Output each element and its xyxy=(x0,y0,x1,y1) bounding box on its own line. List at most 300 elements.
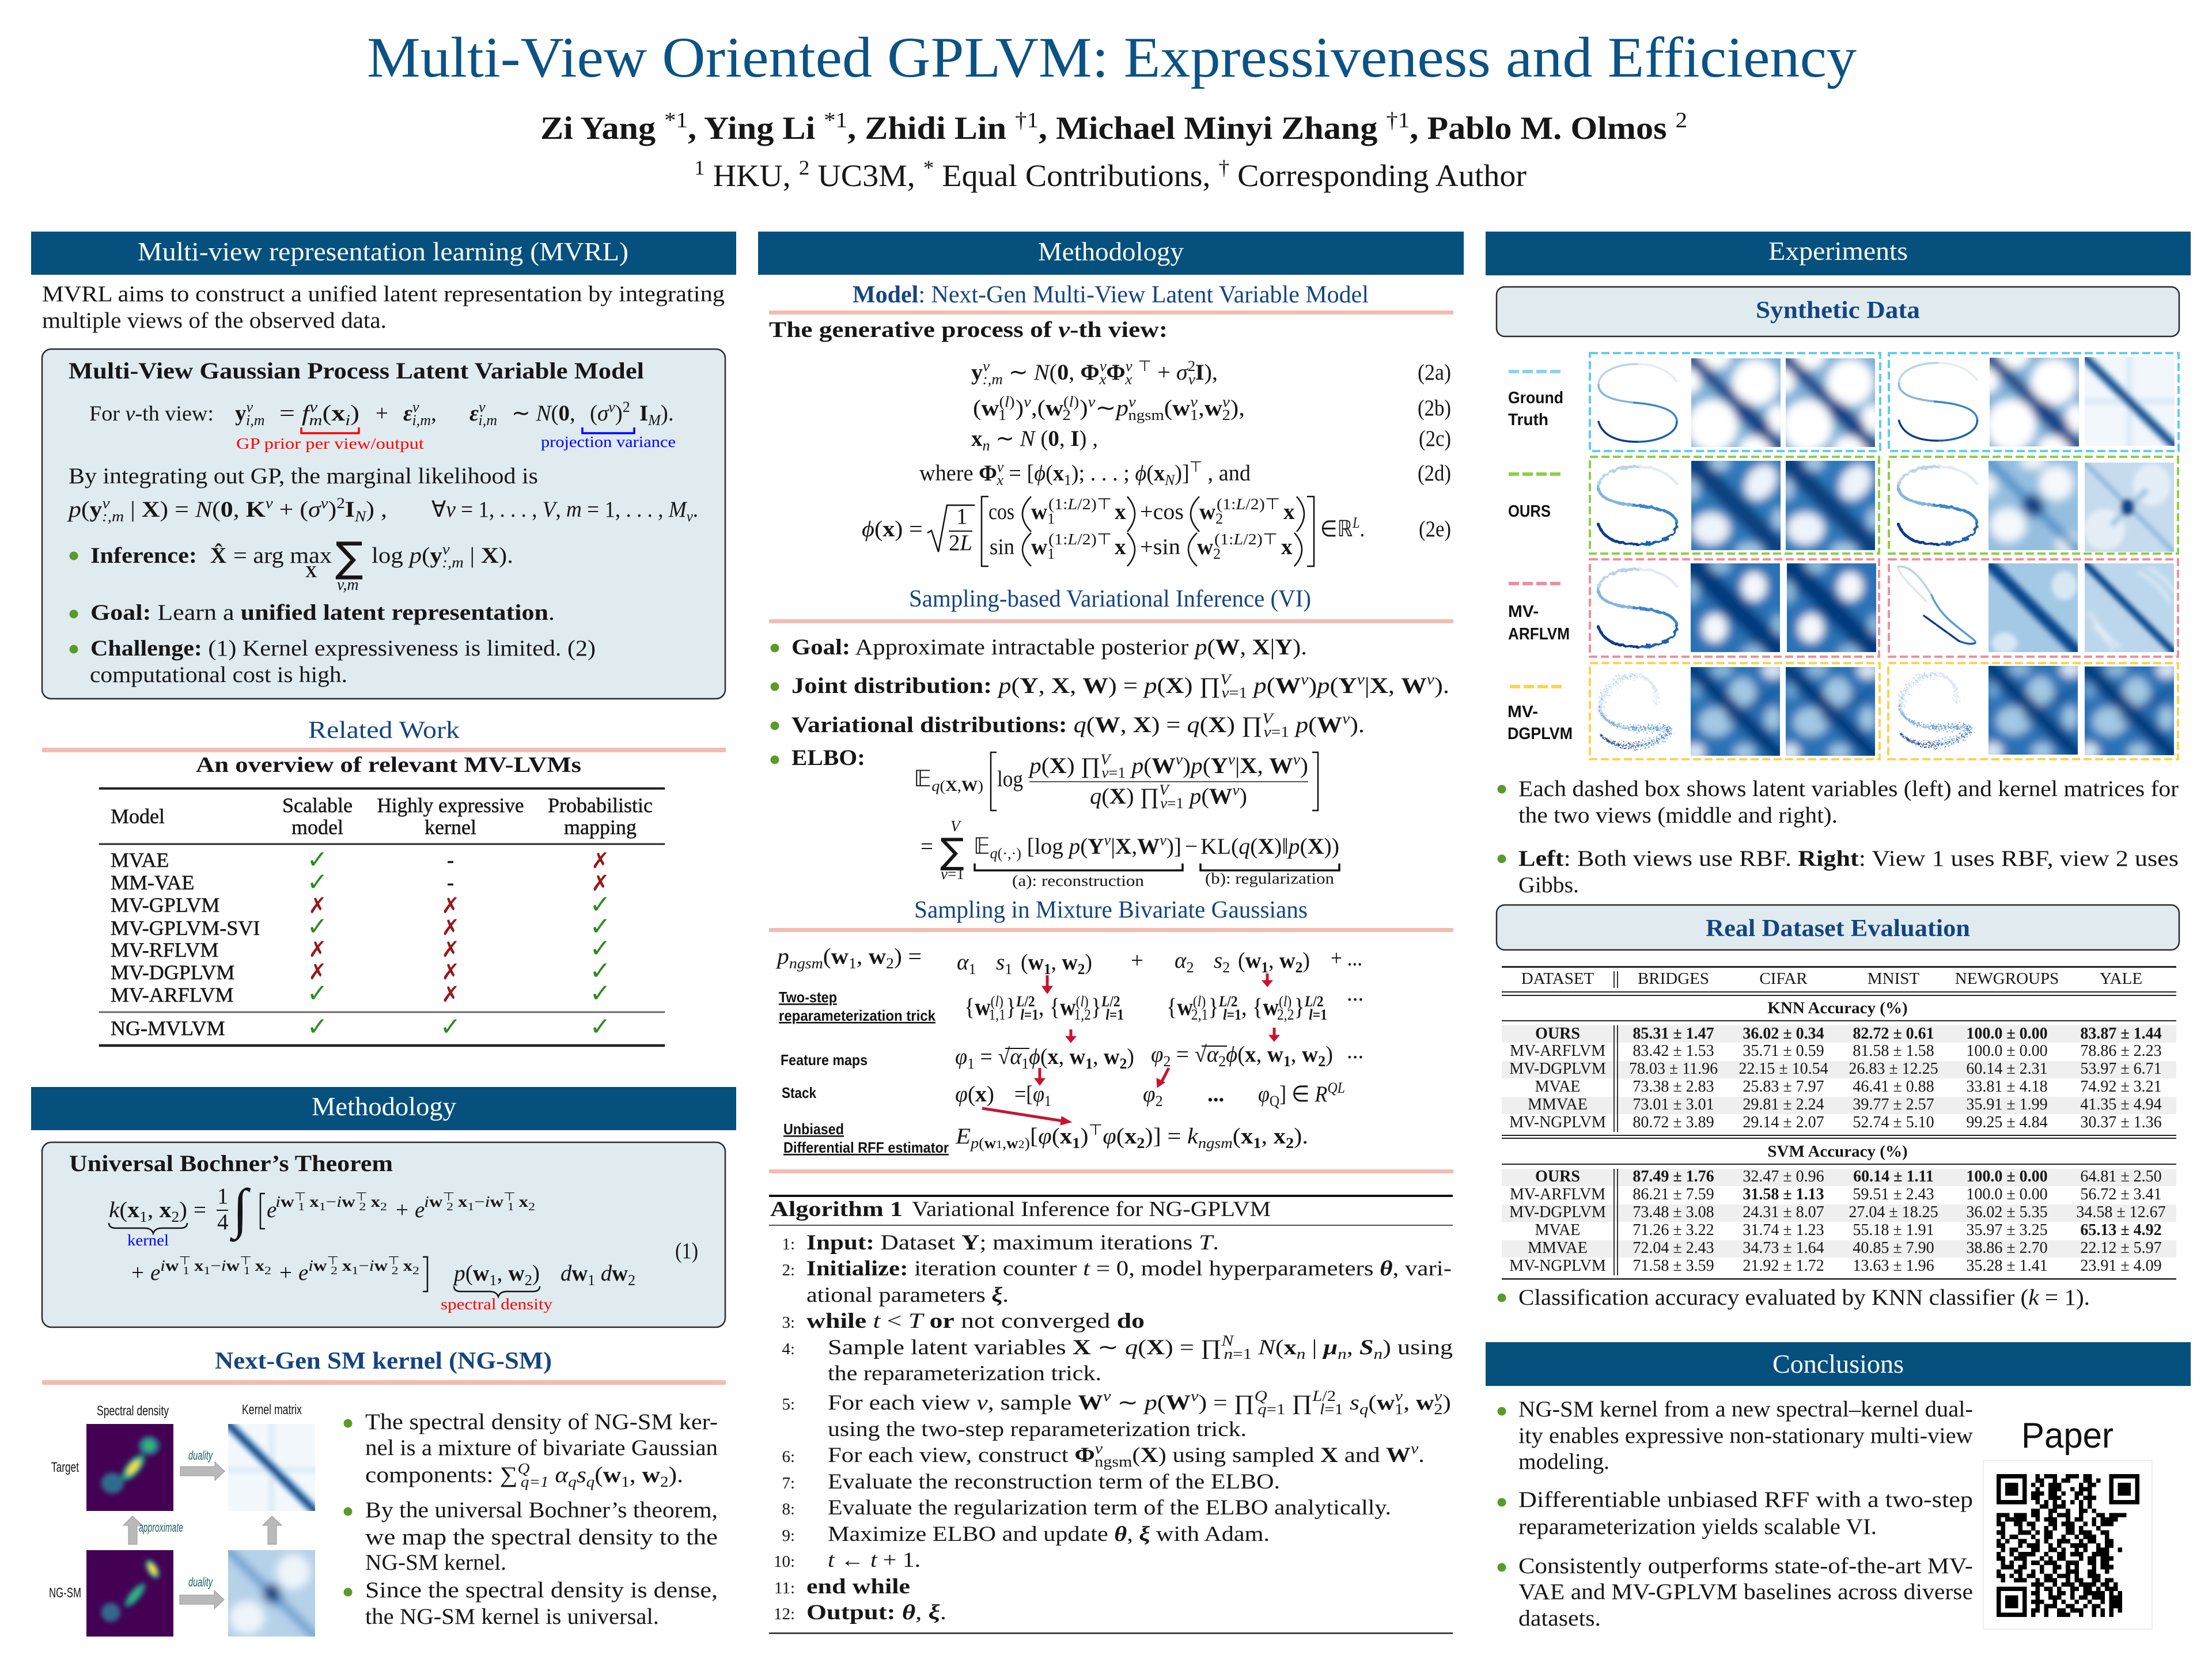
bullet: left right xyxy=(1498,846,2179,897)
bullet: differentiable RFF: reparameterization yields scalable VI. xyxy=(1518,1514,1877,1539)
equation: Bochner kernel: e xyxy=(298,1260,308,1285)
section header: MVRL: Multi-view representation learning (MVRL) xyxy=(138,237,628,266)
figure: sampling diagram: reparameterization trick xyxy=(779,1007,935,1024)
equation: v-th view: IM). xyxy=(639,401,674,429)
bullet: challenge xyxy=(69,636,596,687)
table: accuracy: 41.35 ± 4.94 xyxy=(2080,1096,2162,1113)
table: accuracy: 22.12 ± 5.97 xyxy=(2080,1239,2162,1257)
bullet: NG-SM duality: modeling. xyxy=(1518,1449,1609,1474)
equations 2a to 2e: ∈ℝL. xyxy=(1320,514,1365,541)
table: accuracy: 73.38 ± 2.83 xyxy=(1633,1078,1714,1096)
algorithm 1: 10: xyxy=(774,1552,795,1571)
table: relevant MV-LVMs: mapping xyxy=(564,816,637,839)
algorithm 1: Evaluate the reconstruction term of the ELBO. xyxy=(828,1470,1280,1494)
bullets: NG-SM kernel xyxy=(343,1410,718,1629)
generative process heading: The generative process of v-th view: xyxy=(769,317,1168,342)
table: accuracy: 55.18 ± 1.91 xyxy=(1853,1221,1934,1239)
table: accuracy: 38.86 ± 2.70 xyxy=(1966,1239,2048,1257)
table: accuracy: MV-NGPLVM xyxy=(1509,1113,1606,1131)
panel: related work xyxy=(42,717,726,1047)
table: accuracy: 60.14 ± 1.11 xyxy=(1853,1168,1934,1185)
equation: Bochner kernel: 1 xyxy=(217,1184,228,1209)
figure: spectral density to kernel matrix: Spectral density xyxy=(97,1403,169,1419)
table: accuracy: DATASET xyxy=(1521,969,1594,988)
figure: sampling diagram: Differential RFF estimator xyxy=(783,1139,949,1156)
figure: sampling diagram: φQ] ∈ RQL xyxy=(1258,1080,1345,1109)
algorithm 1: 12: xyxy=(774,1605,795,1623)
table: accuracy: 71.58 ± 3.59 xyxy=(1633,1257,1714,1275)
algorithm 1: Sample latent variables X ∼ q(X) = ∏ Nn=1 N(xn | μn, Sn) using xyxy=(828,1332,1453,1362)
table: relevant MV-LVMs: ✗ xyxy=(591,870,609,896)
figure: sampling diagram: φ(x) xyxy=(955,1082,994,1107)
table: relevant MV-LVMs: MV-RFLVM xyxy=(111,938,218,961)
table: relevant MV-LVMs: ✗ xyxy=(441,937,460,962)
equations 2a to 2e xyxy=(862,358,1451,566)
legend labels xyxy=(1508,372,1573,743)
table: relevant MV-LVMs: ✗ xyxy=(441,982,460,1007)
equations 2a to 2e: (1:L/2)⊤ xyxy=(1217,495,1280,513)
equations 2a to 2e: (2c) xyxy=(1419,426,1451,451)
equations 2a to 2e: (1:L/2)⊤ xyxy=(1048,531,1112,548)
table: accuracy: OURS xyxy=(1535,1168,1580,1185)
table: accuracy: 35.28 ± 1.41 xyxy=(1966,1257,2048,1275)
section header: methodology xyxy=(758,232,1464,275)
bullet: goal: Goal: Approximate intractable posterior p(W, X|Y). xyxy=(791,635,1307,660)
bullet: variational distributions: Variational distributions: q(W, X) = q(X) ∏ Vv=1 p(Wv). xyxy=(791,710,1365,740)
section header: methodology xyxy=(31,1087,736,1130)
section header: methodology: Methodology xyxy=(312,1092,456,1121)
equation: v-th view xyxy=(89,399,676,452)
table: relevant MV-LVMs: ✓ xyxy=(307,979,328,1008)
equations 2a to 2e: sin xyxy=(990,535,1014,559)
bullet: ELBO: ELBO: xyxy=(791,745,865,770)
box: real dataset evaluation xyxy=(1497,905,2179,950)
table: accuracy: 36.02 ± 5.35 xyxy=(1966,1203,2048,1221)
legend labels: OURS xyxy=(1508,502,1551,521)
table: accuracy: 71.26 ± 3.22 xyxy=(1633,1221,1714,1239)
table: accuracy: 78.03 ± 11.96 xyxy=(1629,1060,1718,1078)
table: accuracy: 32.47 ± 0.96 xyxy=(1743,1168,1824,1185)
table: accuracy: 39.77 ± 2.57 xyxy=(1853,1096,1934,1113)
algorithm 1: For each view, construct Φvngsm(X) using sampled X and Wv. xyxy=(828,1440,1425,1470)
equation: v-th view: = fvm(xi) xyxy=(279,399,359,429)
table: relevant MV-LVMs: ✗ xyxy=(441,893,460,918)
equation: v-th view: For v-th view: xyxy=(89,402,214,426)
table: relevant MV-LVMs xyxy=(99,787,665,1047)
table: accuracy: KNN Accuracy (%) xyxy=(1767,999,1908,1017)
figure: sampling diagram: ... xyxy=(1207,1082,1224,1107)
equations 2a to 2e: (1:L/2)⊤ xyxy=(1048,495,1112,513)
bullets: NG-SM kernel: By the universal Bochner’s theorem, xyxy=(365,1498,718,1522)
table: accuracy: CIFAR xyxy=(1759,969,1808,988)
table: accuracy: NEWGROUPS xyxy=(1955,969,2059,988)
table: relevant MV-LVMs: ✗ xyxy=(308,959,327,984)
panel: MVRL xyxy=(31,232,736,699)
panel: methodology middle xyxy=(758,232,1464,1634)
bullet: ELBO: 𝔼q(X,W) xyxy=(914,767,983,794)
bullet: inference xyxy=(69,533,513,594)
figure: spectral density to kernel matrix: Kernel matrix xyxy=(242,1402,302,1418)
table: accuracy: 40.85 ± 7.90 xyxy=(1853,1239,1934,1257)
heading: related work: Related Work xyxy=(308,717,460,744)
section header: experiments: Experiments xyxy=(1768,236,1908,266)
bullet: goal: Goal: Learn a unified latent representation . xyxy=(90,600,555,625)
table: relevant MV-LVMs: MV-ARFLVM xyxy=(111,983,233,1006)
figure: sampling diagram: {w(l)1,1}L/2l=1, {w(l)1,2}L/2l=1 xyxy=(964,993,1124,1023)
table: accuracy: 29.81 ± 2.24 xyxy=(1743,1096,1824,1113)
legend labels: Ground xyxy=(1508,389,1563,407)
equation: marginal likelihood: ∀v = 1, . . . , V, m = 1, . . . , Mv. xyxy=(431,497,698,525)
table: accuracy: 65.13 ± 4.92 xyxy=(2080,1221,2162,1239)
table: accuracy: BRIDGES xyxy=(1638,969,1709,988)
bullets: NG-SM kernel: NG-SM kernel. xyxy=(365,1550,506,1575)
bullet: NG-SM duality: ity enables expressive non-stationary multi-view xyxy=(1518,1423,1973,1448)
equation: Bochner kernel: iw⊤2 x1−iw⊤1 x2 xyxy=(424,1191,535,1213)
table: accuracy: 27.04 ± 18.25 xyxy=(1849,1203,1938,1221)
algorithm 1: Algorithm 1 xyxy=(770,1198,903,1221)
figure: spectral density to kernel matrix: NG-SM xyxy=(49,1585,81,1601)
table: relevant MV-LVMs: Scalable xyxy=(282,794,353,817)
equation: v-th view: εvi,m xyxy=(469,399,497,429)
bullet: challenge: computational cost is high. xyxy=(90,662,347,687)
panel: experiments xyxy=(1486,232,2192,1310)
equation: Bochner kernel: iw⊤1 x1−iw⊤2 x2 xyxy=(275,1191,387,1213)
table: accuracy: 87.49 ± 1.76 xyxy=(1633,1168,1714,1185)
equations 2a to 2e: (2e) xyxy=(1419,517,1451,541)
equation: Bochner kernel: spectral density xyxy=(441,1296,553,1313)
heading: sampling mixture: Sampling in Mixture Bivariate Gaussians xyxy=(914,897,1308,923)
table: accuracy: OURS xyxy=(1535,1025,1580,1043)
paper label: Paper xyxy=(2021,1416,2113,1456)
table: accuracy: MNIST xyxy=(1868,969,1919,988)
figure: sampling diagram: Stack xyxy=(782,1084,816,1101)
table: accuracy: 72.04 ± 2.43 xyxy=(1633,1239,1714,1257)
algorithm 1: 2: xyxy=(782,1261,795,1279)
table: relevant MV-LVMs: ✓ xyxy=(440,1012,461,1041)
table: accuracy: 64.81 ± 2.50 xyxy=(2080,1168,2162,1185)
equations 2a to 2e: w2 xyxy=(1197,535,1221,562)
bullet: dashed box explanation: the two views (middle and right). xyxy=(1518,803,1838,828)
table: relevant MV-LVMs: ✓ xyxy=(590,934,611,963)
table: relevant MV-LVMs: ✗ xyxy=(308,893,327,918)
box: synthetic data: Synthetic Data xyxy=(1756,297,1920,324)
authors: Zi Yang *1, Ying Li *1, Zhidi Lin †1, Michael Minyi Zhang †1, Pablo M. Olmos 2 xyxy=(540,108,1687,146)
heading: model: Model: Next-Gen Multi-View Latent Variable Model xyxy=(853,282,1369,308)
bullet: ELBO: V xyxy=(950,817,962,835)
intro text: MVRL aims to construct a unified latent representation by integrating xyxy=(42,282,725,306)
bullet: ELBO: KL(q(X)‖p(X)) xyxy=(1200,834,1339,859)
table: relevant MV-LVMs: ✓ xyxy=(590,890,611,919)
bullet: outperforms baselines: datasets. xyxy=(1518,1606,1601,1631)
heading: sampling VI: Sampling-based Variational Inference (VI) xyxy=(909,586,1311,612)
equation: Bochner kernel: p(w1, w2) xyxy=(452,1261,540,1289)
intro text: multiple views of the observed data. xyxy=(42,308,387,333)
bullet: left right: Gibbs. xyxy=(1518,873,1579,897)
table: accuracy: 56.72 ± 3.41 xyxy=(2080,1185,2162,1203)
table: accuracy: 23.91 ± 4.09 xyxy=(2080,1257,2162,1275)
algorithm 1: Maximize ELBO and update θ, ξ with Adam. xyxy=(828,1522,1270,1546)
table: accuracy: 53.97 ± 6.71 xyxy=(2080,1060,2162,1078)
table: relevant MV-LVMs: ✗ xyxy=(441,959,460,984)
table: accuracy: 22.15 ± 10.54 xyxy=(1738,1060,1828,1078)
bullet: differentiable RFF: Differentiable unbiased RFF with a two-step xyxy=(1518,1487,1973,1512)
bullet: NG-SM duality xyxy=(1498,1397,1973,1474)
figure: sampling diagram: {w(l)2,1}L/2l=1, {w(l)2,2}L/2l=1 xyxy=(1166,993,1327,1023)
bullets: NG-SM kernel: nel is a mixture of bivariate Gaussian xyxy=(365,1435,718,1460)
equations 2a to 2e: x xyxy=(1115,499,1126,524)
table: accuracy: 74.92 ± 3.21 xyxy=(2080,1078,2162,1096)
heading: NG-SM kernel: Next-Gen SM kernel (NG-SM) xyxy=(215,1348,552,1374)
bullet: NG-SM duality: NG-SM kernel from a new spectral–kernel dual- xyxy=(1518,1397,1973,1422)
algorithm 1: 5: xyxy=(782,1395,795,1414)
table: relevant MV-LVMs: MV-GPLVM xyxy=(111,893,219,916)
table: relevant MV-LVMs: model xyxy=(291,816,343,839)
table: accuracy: YALE xyxy=(2100,969,2142,988)
equation: Bochner kernel: iw⊤1 x1−iw⊤1 x2 xyxy=(160,1255,271,1277)
table: accuracy: 80.72 ± 3.89 xyxy=(1633,1113,1714,1131)
table: accuracy: 59.51 ± 2.43 xyxy=(1853,1185,1934,1203)
equations 2a to 2e: w2 xyxy=(1199,499,1223,527)
legend labels: Truth xyxy=(1508,411,1548,429)
figure: sampling diagram: Feature maps xyxy=(781,1051,868,1069)
box: Bochner theorem xyxy=(42,1142,725,1327)
bullets: NG-SM kernel: we map the spectral density to the xyxy=(365,1525,718,1550)
bullet: joint distribution: Joint distribution: p(Y, X, W) = p(X) ∏ Vv=1 p(Wv)p(Yv|X, Wv). xyxy=(791,671,1449,701)
table: relevant MV-LVMs: ✓ xyxy=(590,979,611,1008)
table: accuracy: 46.41 ± 0.88 xyxy=(1853,1078,1934,1096)
algorithm 1: end while xyxy=(806,1575,910,1599)
equations 2a to 2e: 1 xyxy=(956,504,968,529)
bullets: NG-SM kernel: the NG-SM kernel is universal. xyxy=(365,1604,659,1629)
table: accuracy: 82.72 ± 0.61 xyxy=(1853,1025,1934,1043)
equation: v-th view: ∼ N(0, xyxy=(512,401,575,426)
figure: sampling diagram: ... xyxy=(1347,981,1363,1006)
figure: sampling diagram: (w1, w2) xyxy=(1238,948,1310,976)
bullet: ELBO: (a): reconstruction xyxy=(1012,872,1145,889)
bullet: inference: X xyxy=(305,563,317,581)
table: accuracy: 24.31 ± 8.07 xyxy=(1743,1203,1824,1221)
equation: Bochner kernel: (1) xyxy=(675,1238,698,1263)
text: marginal likelihood: By integrating out GP, the marginal likelihood is xyxy=(69,464,538,488)
figure: sampling diagram: (w1, w2) xyxy=(1021,950,1092,978)
equation: v-th view: projection variance xyxy=(541,433,676,450)
bullet: inference: = arg max xyxy=(233,543,332,568)
bullet: inference: v,m xyxy=(337,576,359,594)
bullet: inference: Inference: xyxy=(90,543,197,568)
equation: Bochner kernel: + xyxy=(131,1260,144,1285)
bullet: inference: log p(yv:,m | X). xyxy=(372,541,513,571)
legend labels: MV- xyxy=(1508,603,1539,621)
figure: sampling diagram: φ2 xyxy=(1143,1082,1163,1109)
figure: sampling diagram: α1 xyxy=(957,950,976,978)
bullets: NG-SM kernel: components: ∑ Qq=1 αqsq(w1, w2). xyxy=(365,1460,683,1490)
algorithm 1 xyxy=(769,1195,1453,1634)
table: accuracy: 100.0 ± 0.00 xyxy=(1966,1025,2048,1043)
equations 2a to 2e: x xyxy=(1281,535,1293,559)
equation: Bochner kernel: 4 xyxy=(217,1210,228,1234)
equations 2a to 2e: +sin xyxy=(1140,535,1180,559)
box: MV-GPLVM xyxy=(42,349,725,699)
figure: sampling diagram: Ep(w1,w2)[φ(x1)⊤φ(x2)] = kngsm(x1, x2). xyxy=(955,1122,1308,1152)
table: relevant MV-LVMs: ✗ xyxy=(308,937,327,962)
equations 2a to 2e: (1:L/2)⊤ xyxy=(1214,531,1278,548)
equations 2a to 2e: w1 xyxy=(1031,535,1055,562)
table: accuracy: MV-NGPLVM xyxy=(1509,1257,1606,1275)
equation: marginal likelihood: p(yv:,m | X) = N(0, Kv + (σv)2IN) , xyxy=(67,495,387,525)
table: relevant MV-LVMs: ✓ xyxy=(307,912,328,941)
table: relevant MV-LVMs: MM-VAE xyxy=(111,871,194,894)
table: accuracy: MVAE xyxy=(1535,1078,1580,1096)
figure: sampling diagram: α2 xyxy=(1175,948,1194,976)
algorithm 1: 4: xyxy=(782,1340,795,1358)
algorithm 1: 9: xyxy=(782,1527,795,1545)
equations 2a to 2e: (2d) xyxy=(1418,461,1451,486)
table: relevant MV-LVMs: ✓ xyxy=(307,845,328,874)
figure: spectral density to kernel matrix xyxy=(49,1402,332,1654)
equation: Bochner kernel: iw⊤2 x1−iw⊤2 x2 xyxy=(308,1255,419,1277)
table: accuracy: 26.83 ± 12.25 xyxy=(1849,1060,1938,1078)
equation: Bochner kernel: e xyxy=(150,1260,160,1285)
table: accuracy: 52.74 ± 5.10 xyxy=(1853,1113,1934,1131)
bullet: dashed box explanation: Each dashed box shows latent variables (left) and kernel matrices for xyxy=(1518,777,2179,801)
figure: spectral density to kernel matrix: duality xyxy=(188,1448,213,1463)
chart: MV-DGPLVM row xyxy=(1590,648,2192,774)
table: accuracy: 78.86 ± 2.23 xyxy=(2080,1042,2162,1060)
bullet: dashed box explanation xyxy=(1498,777,2179,828)
algorithm 1: Input: Dataset Y; maximum iterations T. xyxy=(806,1231,1219,1255)
equation: marginal likelihood xyxy=(67,495,698,525)
bullet: ELBO: log xyxy=(997,767,1023,791)
figure: sampling diagram: s2 xyxy=(1214,948,1230,976)
figure: sampling diagram: + xyxy=(1131,948,1143,973)
bullet: differentiable RFF xyxy=(1498,1487,1973,1539)
table: relevant MV-LVMs: ✓ xyxy=(307,868,328,897)
figure: sampling diagram: Two-step xyxy=(779,988,837,1006)
equation: Bochner kernel: + xyxy=(279,1260,292,1285)
box: MV-GPLVM: Multi-View Gaussian Process Latent Variable Model xyxy=(69,358,644,384)
table: relevant MV-LVMs: NG-MVLVM xyxy=(111,1017,225,1040)
chart: ours row xyxy=(1590,443,2192,570)
table: accuracy: 36.02 ± 0.34 xyxy=(1743,1025,1824,1043)
algorithm 1: 7: xyxy=(782,1474,795,1493)
algorithm 1: Evaluate the regularization term of the ELBO analytically. xyxy=(828,1496,1391,1520)
equation: Bochner kernel: k(x1, x2) xyxy=(109,1198,187,1225)
equation: Bochner kernel: dw1 dw2 xyxy=(560,1261,635,1289)
section header: methodology: Methodology xyxy=(1038,237,1184,266)
bullets: NG-SM kernel: The spectral density of NG-SM ker- xyxy=(365,1410,718,1434)
legend labels: DGPLVM xyxy=(1508,725,1573,743)
panel: conclusions xyxy=(1486,1342,2191,1631)
QR code xyxy=(1983,1460,2152,1629)
equations 2a to 2e: (w(l)1 )v,(w(l)2 )v∼pvngsm(wv1,wv2), xyxy=(973,393,1245,423)
equation: Bochner kernel: ∫ xyxy=(229,1177,251,1242)
box: Bochner theorem: Universal Bochner’s Theorem xyxy=(69,1150,393,1176)
table: accuracy: MV-DGPLVM xyxy=(1509,1060,1606,1078)
chart: MV-ARFLVM row xyxy=(1590,546,2179,670)
table: accuracy: MV-DGPLVM xyxy=(1509,1203,1606,1221)
table: accuracy: 13.63 ± 1.96 xyxy=(1853,1257,1934,1275)
bullet: inference: X̂ xyxy=(210,543,226,568)
table: accuracy xyxy=(1502,966,2176,1280)
table: accuracy: SVM Accuracy (%) xyxy=(1767,1142,1908,1161)
table: accuracy: MVAE xyxy=(1535,1221,1580,1239)
equations 2a to 2e: 2L xyxy=(949,531,972,555)
bullet: outperforms baselines xyxy=(1498,1554,1973,1631)
table: relevant MV-LVMs: ✓ xyxy=(307,1012,328,1041)
box: synthetic data xyxy=(1497,287,2179,336)
table: relevant MV-LVMs: ✓ xyxy=(590,956,611,986)
bullet: ELBO: (b): regularization xyxy=(1205,870,1335,887)
bullets: NG-SM kernel: Since the spectral density is dense, xyxy=(365,1578,718,1603)
table: accuracy: MMVAE xyxy=(1528,1239,1588,1257)
table: relevant MV-LVMs: MV-DGPLVM xyxy=(111,961,234,984)
equation: Bochner kernel: e xyxy=(267,1198,276,1222)
figure: spectral density to kernel matrix: approximate xyxy=(139,1520,183,1535)
table: accuracy: 83.42 ± 1.53 xyxy=(1633,1042,1714,1060)
algorithm 1: ational parameters ξ. xyxy=(806,1283,1009,1307)
table: accuracy: 73.01 ± 3.01 xyxy=(1633,1096,1714,1113)
table: accuracy: 31.74 ± 1.23 xyxy=(1743,1221,1824,1239)
chart: ground truth row xyxy=(1590,340,2179,465)
table: relevant MV-LVMs: kernel xyxy=(425,816,476,839)
bullet: outperforms baselines: VAE and MV-GPLVM baselines across diverse xyxy=(1518,1580,1973,1604)
intro text xyxy=(42,282,725,333)
figure: sampling diagram: pngsm(w1, w2) = xyxy=(775,944,922,972)
section header: conclusions xyxy=(1486,1342,2191,1386)
equations 2a to 2e: (2a) xyxy=(1418,360,1451,385)
red arrows xyxy=(982,974,1279,1125)
bullet: ELBO xyxy=(771,745,1339,889)
section header: experiments xyxy=(1486,232,2191,275)
table: accuracy: MV-ARFLVM xyxy=(1510,1042,1605,1060)
algorithm 1: Initialize: iteration counter t = 0, model hyperparameters θ, vari- xyxy=(806,1257,1452,1281)
table: accuracy: 100.0 ± 0.00 xyxy=(1966,1185,2048,1203)
equations 2a to 2e: (2b) xyxy=(1418,396,1451,421)
algorithm 1: For each view v, sample W v ∼ p(W v) = ∏ Qq=1 ∏ L/2l=1 sq(wv1, wv2) xyxy=(828,1388,1451,1418)
equations 2a to 2e: ϕ(x) = xyxy=(862,517,923,541)
figure: sampling diagram: + ... xyxy=(1331,946,1362,971)
figure: sampling diagram: s1 xyxy=(996,950,1012,978)
legend labels: MV- xyxy=(1508,703,1538,721)
table: accuracy: 86.21 ± 7.59 xyxy=(1633,1185,1714,1203)
equations 2a to 2e: yv:,m ∼ N(0, ΦvxΦvx ⊤ + σ2vI), xyxy=(971,358,1218,388)
table: relevant MV-LVMs: ✗ xyxy=(591,848,609,873)
table: accuracy: 29.14 ± 2.07 xyxy=(1743,1113,1824,1131)
bullet: challenge: Challenge: (1) Kernel expressiveness is limited. (2) xyxy=(90,636,596,661)
bullet: ELBO: v=1 xyxy=(941,865,964,882)
legend labels: ARFLVM xyxy=(1508,625,1570,643)
table: accuracy: 30.37 ± 1.36 xyxy=(2080,1113,2162,1131)
bullet: classification accuracy: Classification accuracy evaluated by KNN classifier ( k = 1). xyxy=(1518,1285,2090,1310)
section header: conclusions: Conclusions xyxy=(1772,1349,1904,1378)
equations 2a to 2e: cos xyxy=(988,499,1014,524)
table: relevant MV-LVMs: ✓ xyxy=(590,912,611,941)
table: accuracy: 81.58 ± 1.58 xyxy=(1853,1042,1934,1060)
table: relevant MV-LVMs: Model xyxy=(111,805,165,828)
figure: sampling diagram: =[φ1 xyxy=(1014,1082,1051,1109)
equations 2a to 2e: x xyxy=(1283,499,1295,524)
table: accuracy: 99.25 ± 4.84 xyxy=(1966,1113,2048,1131)
algorithm 1: using the two-step reparameterization trick. xyxy=(828,1418,1247,1441)
algorithm 1: 3: xyxy=(782,1313,795,1332)
table caption: An overview of relevant MV-LVMs xyxy=(196,753,581,777)
figure: sampling diagram: φ1 = √α1ϕ(x, w1, w2) xyxy=(955,1044,1134,1072)
title: Multi-View Oriented GPLVM: Expressiveness and Efficiency xyxy=(367,25,1857,89)
bullet: ELBO: ∑ xyxy=(940,830,964,872)
equation: v-th view: GP prior per view/output xyxy=(236,435,425,452)
bullet: ELBO: q(X) ∏Vv=1 p(Wv) xyxy=(1090,782,1247,812)
table: accuracy: 31.58 ± 1.13 xyxy=(1743,1185,1824,1203)
